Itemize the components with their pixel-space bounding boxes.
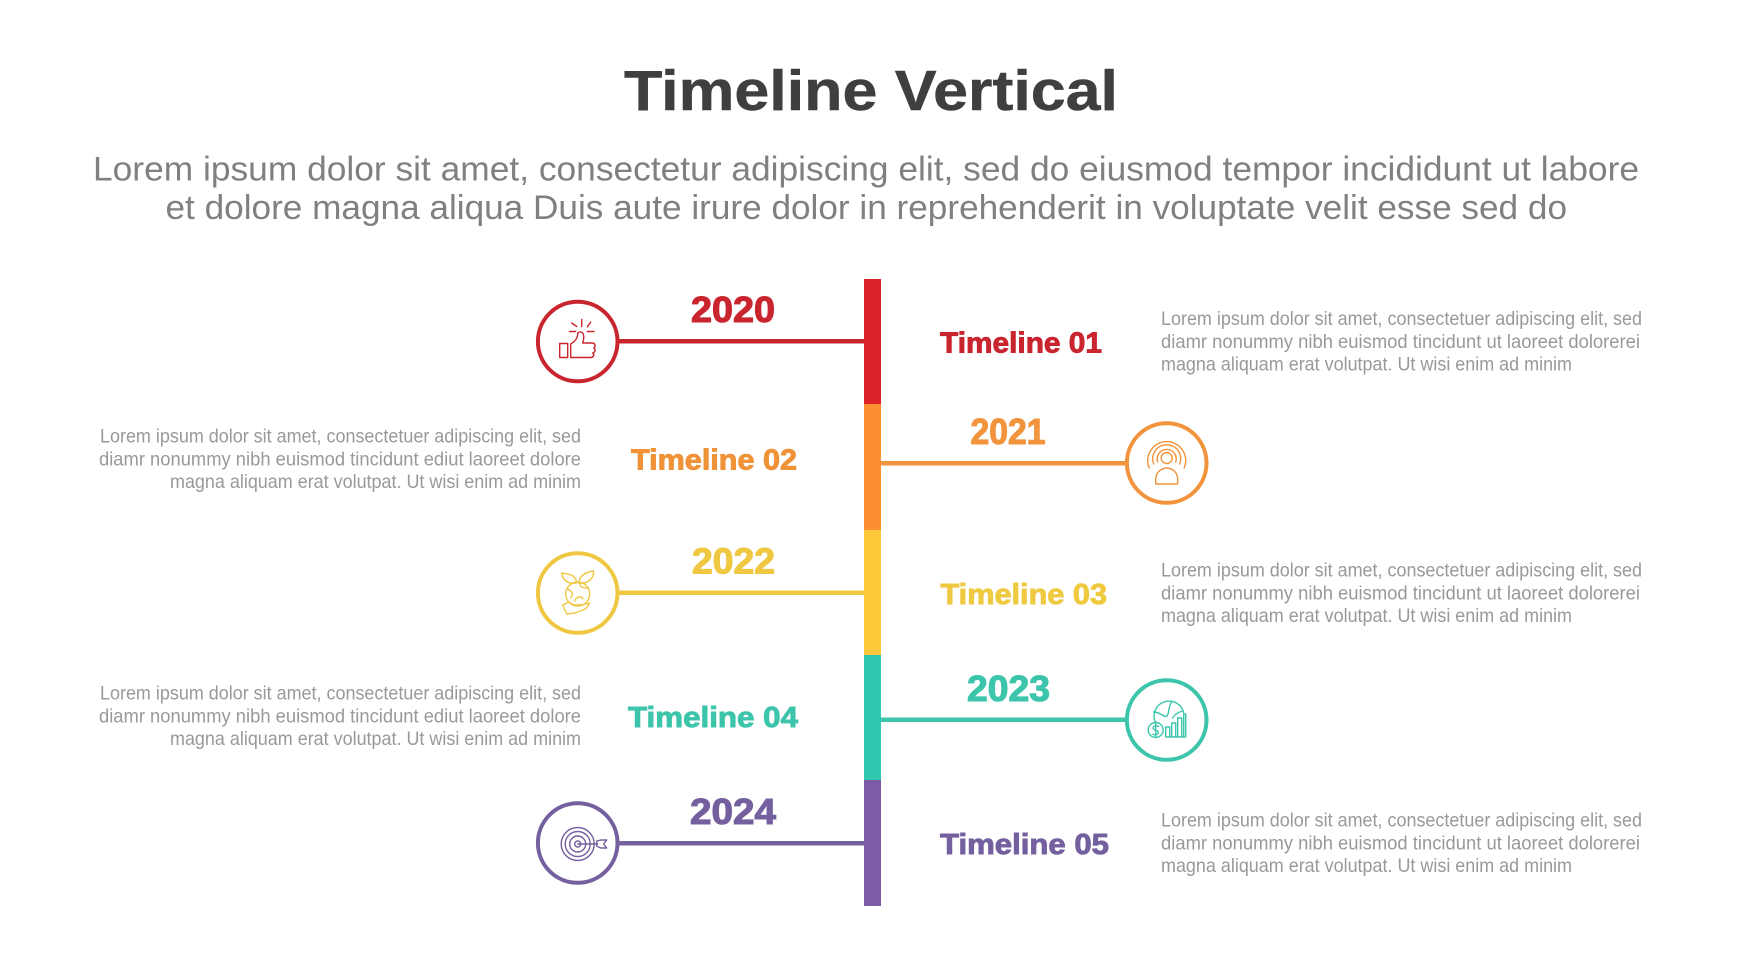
description 02: Lorem ipsum dolor sit amet, consectetuer adipiscing elit, sed (100, 426, 581, 448)
row: 2020 timeline 01 (538, 289, 1642, 381)
connector 2022 (618, 590, 864, 595)
label timeline 02: Timeline 02 (631, 444, 797, 476)
year 2024: 2024 (690, 791, 776, 832)
description 05: Lorem ipsum dolor sit amet, consectetuer adipiscing elit, sed (1161, 810, 1642, 832)
description 05 (1161, 810, 1642, 877)
row: 2023 timeline 04 (99, 668, 1206, 760)
vertical timeline bar (864, 279, 881, 906)
row: 2021 timeline 02 (99, 411, 1206, 503)
label timeline 01: Timeline 01 (940, 328, 1102, 360)
connector 2020 (618, 339, 864, 344)
icon: broadcast person in circle (1127, 423, 1206, 503)
connector 2021 (881, 461, 1127, 466)
icon: globe, coin and bar chart in circle (1127, 680, 1206, 760)
description 02: magna aliquam erat volutpat. Ut wisi enim ad minim (170, 471, 581, 493)
description 04: diamr nonummy nibh euismod tincidunt ediut laoreet dolore (99, 706, 581, 728)
description 04: Lorem ipsum dolor sit amet, consectetuer adipiscing elit, sed (100, 682, 581, 704)
description 05: diamr nonummy nibh euismod tincidunt ut laoreet dolorerei (1161, 832, 1640, 854)
connector 2024 (618, 841, 864, 846)
label timeline 04: Timeline 04 (628, 702, 798, 734)
description 04 (99, 682, 581, 750)
connector 2023 (881, 718, 1127, 722)
year 2022: 2022 (692, 540, 775, 582)
description 03: Lorem ipsum dolor sit amet, consectetuer adipiscing elit, sed (1161, 560, 1642, 582)
description 03 (1161, 560, 1642, 627)
description 01: diamr nonummy nibh euismod tincidunt ut laoreet dolorerei (1161, 331, 1640, 353)
subtitle text: Lorem ipsum dolor sit amet, consectetur adipiscing elit, sed do eiusmod tempor incididunt ut labore (93, 150, 1639, 188)
year 2021: 2021 (970, 411, 1046, 452)
icon: globe with leaves on hand in circle (538, 553, 618, 633)
description 02: diamr nonummy nibh euismod tincidunt ediut laoreet dolore (99, 448, 581, 470)
description 01: magna aliquam erat volutpat. Ut wisi enim ad minim (1161, 354, 1572, 376)
label timeline 03: Timeline 03 (940, 579, 1107, 611)
row: 2022 timeline 03 (538, 540, 1642, 633)
subtitle text: et dolore magna aliqua Duis aute irure dolor in reprehenderit in voluptate velit esse sed do (166, 189, 1567, 227)
description 04: magna aliquam erat volutpat. Ut wisi enim ad minim (170, 728, 581, 750)
description 01 (1161, 308, 1642, 376)
row: 2024 timeline 05 (538, 791, 1642, 883)
description 03: diamr nonummy nibh euismod tincidunt ut laoreet dolorerei (1161, 582, 1640, 604)
description 03: magna aliquam erat volutpat. Ut wisi enim ad minim (1161, 605, 1572, 627)
year 2020: 2020 (691, 289, 775, 330)
label timeline 05: Timeline 05 (940, 829, 1109, 861)
description 01: Lorem ipsum dolor sit amet, consectetuer adipiscing elit, sed (1161, 308, 1642, 330)
description 05: magna aliquam erat volutpat. Ut wisi enim ad minim (1161, 855, 1572, 877)
description 02 (99, 426, 581, 493)
icon: thumbs up in circle (538, 302, 618, 381)
subtitle text (93, 150, 1639, 227)
title: Timeline Vertical (624, 59, 1118, 123)
icon: target with arrow in circle (538, 803, 618, 883)
year 2023: 2023 (967, 668, 1050, 709)
